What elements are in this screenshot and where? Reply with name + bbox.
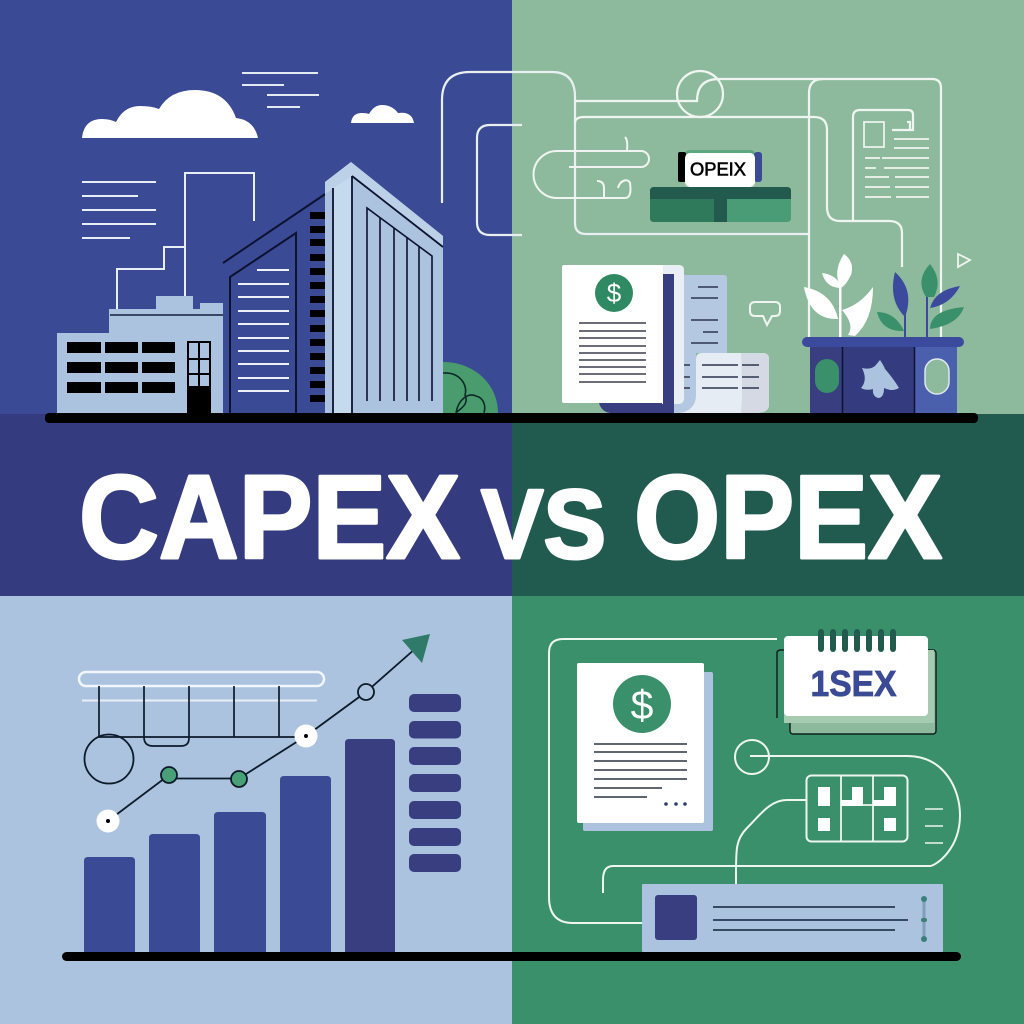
pill outline: [534, 137, 649, 198]
connector lines: [549, 639, 960, 923]
calendar: [777, 629, 936, 734]
icon: receipt: [680, 353, 769, 413]
document with dollar: [577, 663, 713, 831]
invoice text lines: [579, 323, 646, 382]
panel: opex operations scene: [534, 71, 970, 413]
panel: top left background: [0, 0, 512, 414]
arrowhead: [402, 634, 430, 663]
office tower: [325, 162, 443, 413]
circuit line from factory: [117, 173, 254, 309]
title: CAPEX: [79, 451, 460, 584]
title band right: [512, 414, 1024, 596]
stacked legend blocks: [409, 694, 461, 872]
title: VS: [481, 469, 606, 579]
calendar rings: [818, 629, 896, 652]
bush: [443, 362, 498, 413]
panel: bottom right background: [512, 596, 1024, 1024]
panel: opex bottom scene: [549, 629, 960, 952]
slider: [921, 896, 927, 942]
bar chart: [84, 739, 395, 952]
calendar: 1SEX: [810, 663, 896, 704]
mid building outline: [223, 176, 352, 413]
grid icon: [806, 775, 908, 842]
document text lines: [594, 744, 687, 797]
rail diagram: [79, 672, 324, 784]
panel: capex growth chart: [79, 634, 461, 952]
label: opeix: OPEIX: [690, 160, 746, 180]
factory windows: [67, 342, 175, 393]
icon: plant white leaves: [804, 254, 873, 337]
bottom ground line: [62, 952, 961, 961]
icon: dollar coin: [595, 274, 633, 312]
left circuit connectors: [442, 72, 809, 235]
icon: small cloud: [351, 105, 414, 123]
icon: dollar coin: $: [631, 682, 654, 728]
icon: dollar coin: $: [607, 278, 622, 308]
icon: invoice stack: [562, 265, 684, 413]
title: [79, 451, 942, 584]
text lines left: [82, 182, 156, 238]
icon: large cloud: [82, 90, 258, 138]
trend line with arrow: [96, 634, 430, 832]
icon: dollar coin: [613, 675, 671, 733]
panel: top right background: [512, 0, 1024, 414]
icon: play triangle: [958, 254, 970, 267]
panel: capex facilities scene: [57, 73, 498, 413]
sky lines: [242, 73, 319, 107]
bottom panel card: [642, 884, 943, 952]
icon: back page: [674, 275, 727, 413]
data points: [96, 684, 374, 832]
low factory building: [57, 296, 223, 413]
icon: plant colored leaves: [877, 264, 964, 337]
icon: speech bubble: [750, 302, 780, 325]
title: OPEX: [634, 451, 942, 584]
title band left: [0, 414, 512, 596]
icon: planter: [802, 337, 964, 413]
dots: [664, 802, 687, 806]
circuit lines: [575, 71, 941, 337]
panel: bottom left background: [0, 596, 512, 1024]
label: opeix: [678, 150, 762, 187]
factory door: [187, 341, 211, 413]
top ground line: [45, 413, 978, 423]
building window stubs: [310, 212, 325, 402]
document outline lines: [864, 122, 929, 197]
icon: green tray: [650, 187, 791, 222]
